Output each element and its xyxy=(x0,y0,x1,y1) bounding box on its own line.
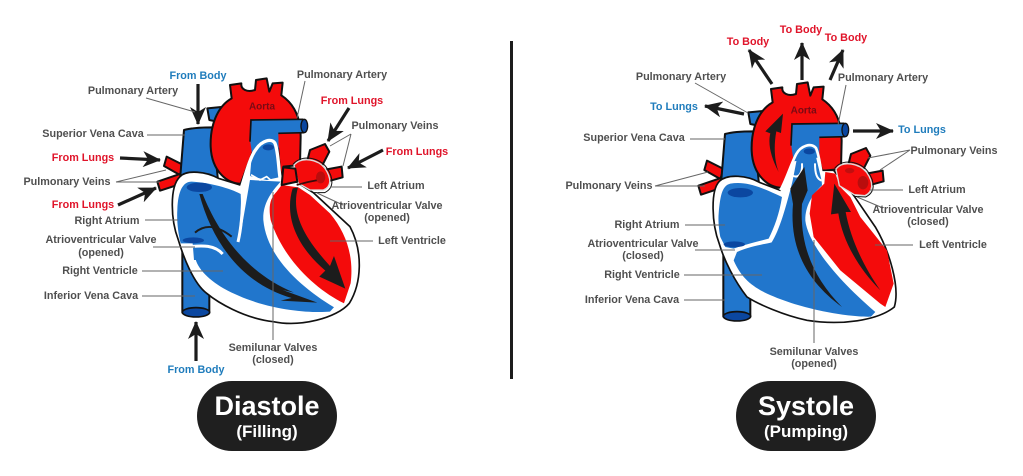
heart wall xyxy=(713,142,896,322)
labels: systole: To Lungs xyxy=(650,101,698,113)
labels: systole: (closed) xyxy=(622,250,664,262)
diagram: diastole heart xyxy=(157,78,359,323)
inferior opening xyxy=(723,312,751,321)
pulmonary artery stub xyxy=(207,107,225,123)
labels: diastole: (opened) xyxy=(78,247,124,259)
labels: systole: Inferior Vena Cava xyxy=(585,294,680,306)
semilunar valves xyxy=(251,175,280,180)
labels: systole: To Body xyxy=(825,32,867,44)
pulmonary veins right xyxy=(307,144,343,182)
diastole arrow: right side xyxy=(199,194,317,303)
labels: systole xyxy=(565,24,998,370)
valve flaps xyxy=(297,180,322,185)
leader lines: systole xyxy=(655,83,913,343)
flow arrows: systole xyxy=(705,43,893,131)
labels: systole: Right Atrium xyxy=(615,219,679,231)
white arch xyxy=(780,145,822,190)
pulmonary artery end xyxy=(301,119,308,133)
labels: systole: Right Ventricle xyxy=(604,269,680,281)
badge: systole: (Pumping) xyxy=(764,422,848,441)
labels: diastole: Pulmonary Artery xyxy=(88,85,178,97)
arrow: aorta xyxy=(765,114,783,172)
labels: diastole: Pulmonary Veins xyxy=(351,120,439,132)
badge: diastole: (Filling) xyxy=(236,422,298,441)
labels: diastole: From Body xyxy=(168,364,224,376)
labels: diastole: From Lungs xyxy=(321,95,383,107)
pulmonary trunk inner xyxy=(250,137,279,180)
labels: diastole xyxy=(23,69,448,376)
white arch xyxy=(241,140,280,190)
labels: diastole: From Lungs xyxy=(386,146,448,158)
labels: systole: Atrioventricular Valve xyxy=(587,238,699,250)
pulmonary veins left xyxy=(698,161,724,195)
right atrium xyxy=(718,183,782,249)
aorta xyxy=(752,82,842,188)
labels: systole: Pulmonary Artery xyxy=(838,72,928,84)
right ventricle xyxy=(734,147,875,317)
labels: systole: Left Ventricle xyxy=(919,239,987,251)
labels: diastole: Atrioventricular Valve xyxy=(331,200,443,212)
labels: diastole: (opened) xyxy=(364,212,410,224)
aorta label: Aorta xyxy=(791,105,817,116)
septum white line xyxy=(238,192,243,242)
badge: diastole: Diastole xyxy=(214,391,320,421)
labels: systole: Pulmonary Artery xyxy=(636,71,726,83)
badge: diastole xyxy=(197,381,337,451)
av flap white xyxy=(183,246,223,254)
pulmonary trunk xyxy=(791,123,845,161)
left ventricle xyxy=(810,172,894,307)
labels: diastole: Atrioventricular Valve xyxy=(45,234,157,246)
left atrium xyxy=(836,164,872,196)
labels: diastole: (closed) xyxy=(252,354,294,366)
vena cava xyxy=(721,131,759,317)
pulmonary artery end xyxy=(842,123,849,137)
aorta label: Aorta xyxy=(249,101,275,112)
heart wall xyxy=(172,138,359,323)
labels: diastole: Inferior Vena Cava xyxy=(44,290,139,302)
labels: systole: To Body xyxy=(780,24,822,36)
labels: diastole: Left Ventricle xyxy=(378,235,446,247)
diastole arrow: left side xyxy=(290,187,345,289)
labels: diastole: From Lungs xyxy=(52,199,114,211)
labels: systole: Semilunar Valves xyxy=(770,346,858,358)
labels: systole: To Lungs xyxy=(898,124,946,136)
badge: systole: Systole xyxy=(758,391,854,421)
labels: systole: To Body xyxy=(727,36,769,48)
right atrium xyxy=(177,182,241,260)
labels: diastole: Pulmonary Artery xyxy=(297,69,387,81)
labels: diastole: Right Ventricle xyxy=(62,265,138,277)
pulmonary trunk xyxy=(250,119,304,157)
badge: systole xyxy=(736,381,876,451)
divider xyxy=(510,41,513,379)
labels: systole: Pulmonary Veins xyxy=(910,145,998,157)
aorta xyxy=(211,78,301,184)
pulmonary veins right xyxy=(848,148,884,186)
vena cava xyxy=(180,127,218,313)
pulmonary veins left xyxy=(157,157,183,191)
semilunar open valves xyxy=(793,163,822,181)
left ventricle xyxy=(270,185,351,303)
left atrium xyxy=(294,160,330,190)
labels: diastole: Semilunar Valves xyxy=(229,342,317,354)
arrow: right ventricle xyxy=(790,167,842,307)
arrow: left ventricle xyxy=(831,184,880,290)
labels: systole: Atrioventricular Valve xyxy=(872,204,984,216)
leader lines: diastole xyxy=(116,81,373,340)
labels: systole: (closed) xyxy=(907,216,949,228)
aortic root xyxy=(282,167,297,185)
labels: systole: Superior Vena Cava xyxy=(583,132,686,144)
pulmonary artery stub xyxy=(748,111,766,127)
labels: systole: Pulmonary Veins xyxy=(565,180,653,192)
labels: systole: Left Atrium xyxy=(908,184,966,196)
av flap dark xyxy=(195,227,232,237)
labels: diastole: Pulmonary Veins xyxy=(23,176,111,188)
flow arrows: diastole xyxy=(118,84,383,361)
diagram: systole heart xyxy=(698,82,896,322)
labels: diastole: From Body xyxy=(170,70,226,82)
labels: diastole: From Lungs xyxy=(52,152,114,164)
labels: diastole: Left Atrium xyxy=(367,180,425,192)
labels: systole: (opened) xyxy=(791,358,837,370)
right ventricle xyxy=(195,180,334,312)
labels: diastole: Right Atrium xyxy=(75,215,139,227)
labels: diastole: Superior Vena Cava xyxy=(42,128,145,140)
inferior opening xyxy=(182,308,210,317)
